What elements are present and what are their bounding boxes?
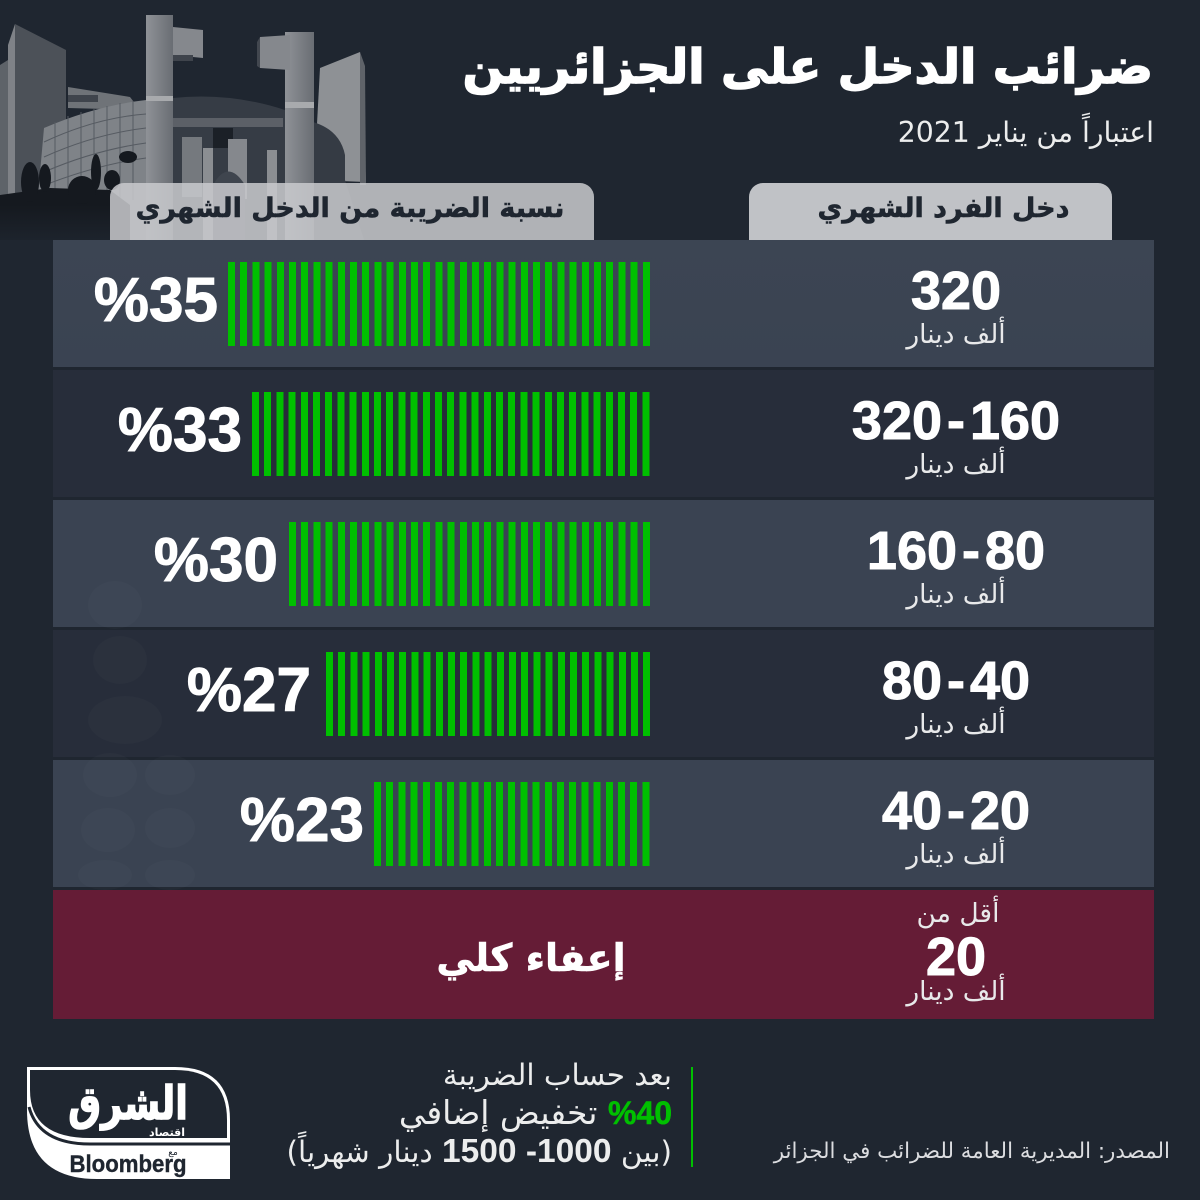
logo wordmark: الشرق (68, 1076, 188, 1131)
row 80-160 (53, 500, 1154, 627)
source: المصدر: المديرية العامة للضرائب في الجزائر (774, 1139, 1170, 1164)
row 20-40 (53, 760, 1154, 887)
income unit: ألف دينار (906, 709, 1006, 740)
income value: 80 - 40 (882, 651, 1030, 711)
income column heading: دخل الفرد الشهري (818, 193, 1069, 224)
income value: 160 - 80 (867, 521, 1045, 581)
row exempt (53, 890, 1154, 1019)
logo with label: مع (168, 1148, 178, 1158)
percent label: %35 (94, 266, 218, 335)
income value: 40 - 20 (882, 781, 1030, 841)
income unit: ألف دينار (906, 839, 1006, 870)
income value: 320 - 160 (852, 391, 1060, 451)
income unit: ألف دينار (906, 579, 1006, 610)
note line 2: %40 تخفيض إضافي (399, 1093, 672, 1132)
tax rate column heading: نسبة الضريبة من الدخل الشهري (136, 193, 564, 224)
note line 1: بعد حساب الضريبة (443, 1058, 672, 1092)
header pill: income column (749, 183, 1112, 240)
percent label: %23 (240, 786, 364, 855)
logo partner: Bloomberg (70, 1151, 186, 1178)
row 40-80 (53, 630, 1154, 757)
income unit: ألف دينار (906, 976, 1006, 1007)
logo (27, 1067, 230, 1179)
percent label: %33 (118, 396, 242, 465)
percent label: %30 (154, 526, 278, 595)
footnote divider (691, 1067, 693, 1167)
income unit: ألف دينار (906, 449, 1006, 480)
subtitle: اعتباراً من يناير 2021 (898, 116, 1154, 149)
row 160-320 (53, 370, 1154, 497)
percent label: %27 (187, 656, 311, 725)
income value: 20 (926, 927, 986, 987)
logo sub text: اقتصاد (149, 1126, 185, 1139)
header pill: tax rate column (110, 183, 594, 240)
row 320 (53, 240, 1154, 367)
income value: 320 (911, 261, 1001, 321)
note line 3: (بين 1500 -1000 دينار شهرياً) (286, 1133, 672, 1170)
bar 30 percent (289, 522, 650, 606)
title: ضرائب الدخل على الجزائريين (463, 40, 1153, 95)
bar 27 percent (326, 652, 650, 736)
income unit: ألف دينار (906, 319, 1006, 350)
footnote text (286, 1058, 672, 1170)
bar 35 percent (228, 262, 650, 346)
full exemption text: إعفاء كلي (436, 936, 626, 980)
bar 33 percent (252, 392, 650, 476)
bar 23 percent (374, 782, 650, 866)
less than label: أقل من (917, 898, 999, 929)
background building photo (0, 15, 366, 240)
